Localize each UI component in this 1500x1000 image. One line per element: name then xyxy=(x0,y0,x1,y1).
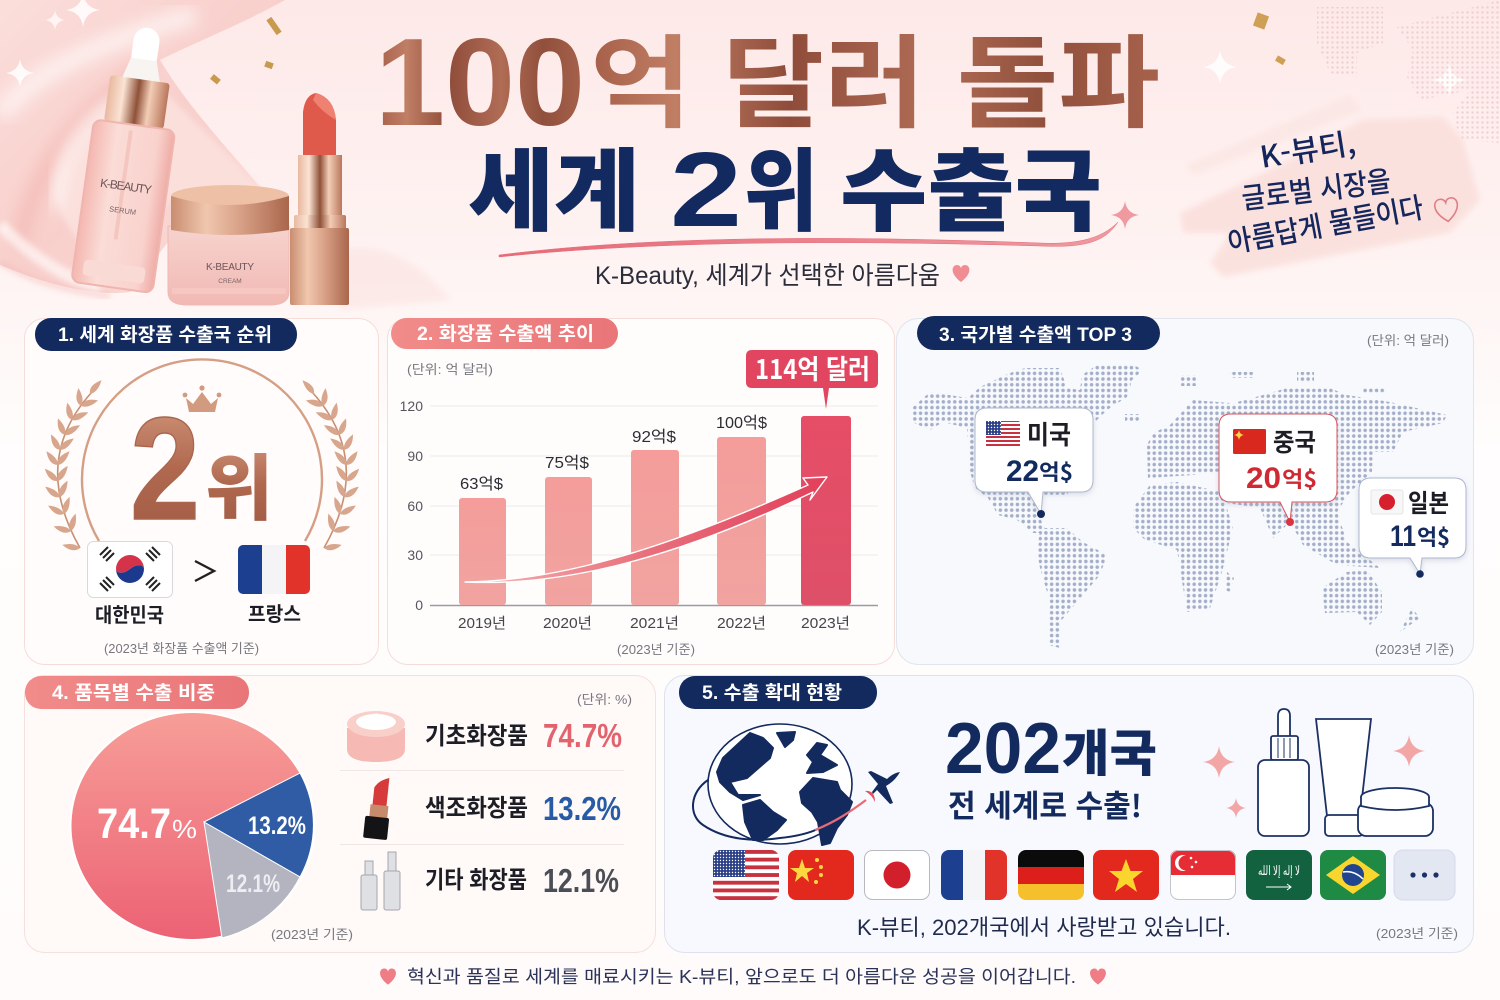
pie chart xyxy=(70,712,314,940)
bar chart: 2021년 xyxy=(630,615,679,632)
heading 3 xyxy=(917,316,1160,350)
flag: Saudi Arabia xyxy=(1246,850,1312,900)
product: cream jar xyxy=(168,185,289,305)
product: cream jar: K-BEAUTY xyxy=(206,262,254,273)
laurel right xyxy=(301,378,362,551)
brush stroke behind handwriting xyxy=(1180,95,1480,277)
title: line 2: 위 xyxy=(744,119,818,249)
flags row xyxy=(713,850,1455,900)
bar chart: 2022년 xyxy=(717,615,766,632)
label: 대한민국: 대한민국 xyxy=(95,599,164,628)
pie chart: 12.1% xyxy=(226,870,280,898)
callout: 114억 달러 xyxy=(746,348,878,409)
heading 1 xyxy=(35,318,297,351)
label row 2: 색조화장품 xyxy=(425,788,528,823)
flag: USA xyxy=(713,850,779,900)
bar chart: 100억$ xyxy=(716,414,767,432)
rank: 2위: 2 xyxy=(130,387,200,550)
greater-than sign xyxy=(195,561,214,581)
bar chart: 75억$ xyxy=(545,454,589,472)
heading 5: 5. 수출 확대 현황 xyxy=(702,682,842,704)
decoration: confetti and sparkles xyxy=(210,12,1466,97)
product: serum bottle: K-BEAUTY xyxy=(99,176,153,197)
label row 2 xyxy=(425,788,621,827)
flag: more xyxy=(1394,850,1455,900)
bar chart xyxy=(400,398,878,632)
heading 2: 2. 화장품 수출액 추이 xyxy=(417,323,594,345)
bar chart: 120 xyxy=(400,398,423,414)
laurel left xyxy=(42,378,103,551)
flag: Vietnam xyxy=(1093,850,1159,900)
note: (2023년 기준) xyxy=(271,927,353,942)
icons: sparkles xyxy=(1203,735,1425,818)
label row 2: 13.2% xyxy=(543,790,621,827)
stat: 202개국: 202 xyxy=(945,709,1061,789)
icon: bottles xyxy=(361,852,400,910)
callout: Japan: 억$ xyxy=(1417,520,1450,552)
subheading: 전 세계로 수출! xyxy=(948,781,1142,826)
note: (2023년 기준) xyxy=(1375,642,1454,657)
icon: subtitle heart xyxy=(953,265,969,282)
decoration: pink silk swirl xyxy=(0,0,450,310)
flag: France xyxy=(238,545,310,594)
callout: China: 억$ xyxy=(1282,462,1317,494)
pie chart: 13.2% xyxy=(248,812,306,840)
note: (2023년 기준) xyxy=(617,642,695,657)
callout: Japan: 일본 xyxy=(1408,484,1449,520)
title underline swoosh xyxy=(499,201,1139,257)
panel 5: export expansion xyxy=(664,676,1474,952)
callout: USA: 미국 xyxy=(1027,415,1071,452)
product: serum bottle xyxy=(71,22,189,293)
icons: cosmetics outlines xyxy=(1258,709,1433,836)
unit label: (단위: %) xyxy=(577,692,632,707)
flag: Brazil xyxy=(1320,850,1386,900)
heading 1: 1. 세계 화장품 수출국 순위 xyxy=(58,324,272,346)
flag: South Korea xyxy=(88,542,172,598)
product: lipstick xyxy=(290,93,349,305)
rank: 2위: 위 xyxy=(205,430,273,535)
heading 5 xyxy=(679,676,877,709)
panel 1: world ranking xyxy=(24,318,378,664)
callout: USA: 22 xyxy=(1006,455,1039,488)
callout: China: 중국 xyxy=(1273,423,1316,459)
label row 1: 기초화장품 xyxy=(425,716,528,751)
heading 2 xyxy=(391,318,618,349)
handwritten slogan xyxy=(1224,118,1460,262)
callout: China xyxy=(1219,414,1337,526)
callout: Japan xyxy=(1359,478,1466,578)
bar chart: 90 xyxy=(407,448,423,464)
bar chart: 2023년 xyxy=(801,615,850,632)
panel 3: top 3 countries map xyxy=(896,316,1474,664)
pie chart: % xyxy=(172,814,197,844)
label row 1 xyxy=(425,716,622,754)
title: line 2 xyxy=(468,119,1102,249)
label row 1: 74.7% xyxy=(543,717,622,754)
bar chart: 2019년 xyxy=(458,615,506,632)
bar chart: 0 xyxy=(415,597,423,613)
product: cream jar: CREAM xyxy=(218,278,242,285)
heading 3: 3. 국가별 수출액 TOP 3 xyxy=(939,324,1132,346)
title: line 1 xyxy=(375,3,1160,152)
callout: Japan: 11 xyxy=(1390,520,1416,553)
handwritten slogan: K-뷰티, xyxy=(1257,118,1358,177)
dotted world map xyxy=(912,364,1447,648)
stat: 202개국 xyxy=(945,709,1157,789)
handwritten slogan: 글로벌 시장을 xyxy=(1239,158,1393,218)
bar chart: 92억$ xyxy=(632,428,676,446)
flag: France xyxy=(941,850,1007,900)
handwritten slogan: 아름답게 물들이다 xyxy=(1224,184,1426,262)
title: line 1: 100 xyxy=(375,14,585,152)
note: (2023년 기준) xyxy=(1376,926,1458,941)
panel 2: export trend xyxy=(388,318,894,664)
flag: Singapore xyxy=(1170,850,1236,900)
unit label: (단위: 억 달러) xyxy=(1367,333,1449,348)
decoration: faint dotted world map xyxy=(1317,0,1500,143)
flag: Germany xyxy=(1018,850,1084,900)
icon: cream jar xyxy=(347,711,405,762)
callout: 114억 달러: 114억 달러 xyxy=(755,348,870,387)
bar chart: 63억$ xyxy=(460,475,503,493)
ring arc xyxy=(82,359,322,541)
title: line 2: 세계 xyxy=(468,119,640,249)
heading 4: 4. 품목별 수출 비중 xyxy=(52,682,215,704)
label: 프랑스: 프랑스 xyxy=(248,598,301,627)
rank: 2위 xyxy=(130,387,273,550)
flag: China xyxy=(788,850,854,900)
bar chart: 60 xyxy=(407,498,423,514)
flag: Saudi Arabia: لا إله إلا الله xyxy=(1258,863,1300,879)
subtitle: K-Beauty, 세계가 선택한 아름다움 xyxy=(595,262,940,290)
label row 3 xyxy=(425,860,619,899)
heading 4 xyxy=(25,676,249,709)
note: (2023년 화장품 수출액 기준) xyxy=(104,641,259,656)
bar chart: 30 xyxy=(407,547,423,563)
flag: Japan xyxy=(864,850,930,900)
callout: USA xyxy=(975,408,1093,518)
callout: China: 20 xyxy=(1246,462,1281,495)
growth arrow xyxy=(465,477,827,582)
bar chart: 2020년 xyxy=(543,615,592,632)
label row 3: 기타 화장품 xyxy=(425,860,527,895)
icon: globe with plane xyxy=(693,724,900,845)
product: serum bottle: SERUM xyxy=(109,204,137,217)
caption: K-뷰티, 202개국에서 사랑받고 있습니다. xyxy=(857,915,1231,940)
title: line 2: 수출국 xyxy=(840,119,1102,249)
icon: crown xyxy=(183,385,221,412)
stat: 202개국: 개국 xyxy=(1062,714,1157,786)
callout: USA: 억$ xyxy=(1039,455,1073,487)
title: line 1: 억 달러 돌파 xyxy=(590,3,1160,149)
unit label: (단위: 억 달러) xyxy=(407,362,493,377)
title: line 2: 2 xyxy=(670,131,742,249)
panel 4: category share xyxy=(24,676,656,952)
pie chart: 74.7 xyxy=(97,800,171,848)
footer message: 혁신과 품질로 세계를 매료시키는 K-뷰티, 앞으로도 더 아름다운 성공을 이어갑니다. xyxy=(407,967,1076,987)
label row 3: 12.1% xyxy=(543,862,619,899)
icon: lipstick xyxy=(363,776,393,840)
